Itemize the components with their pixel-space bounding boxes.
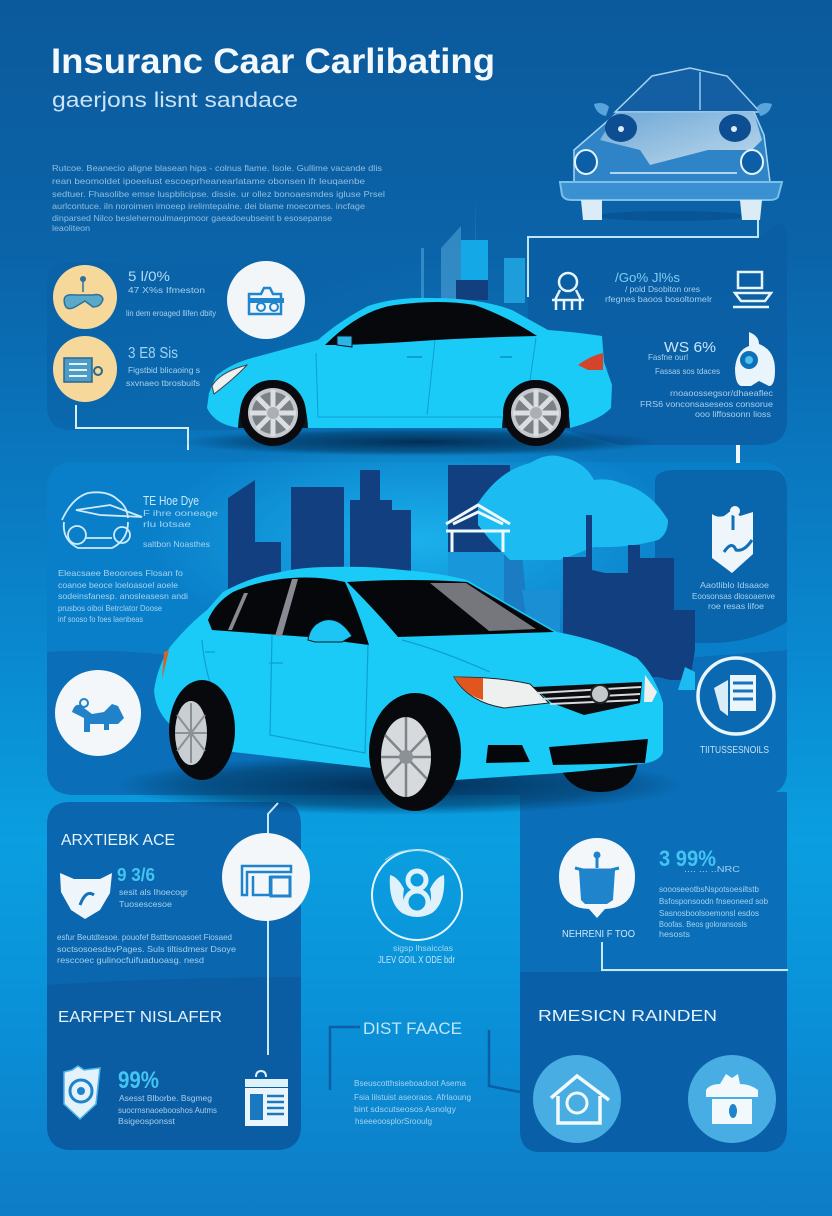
far wheel [558, 760, 638, 792]
wheel arches [238, 380, 570, 428]
illustration: front car outline [560, 68, 782, 221]
icon: white circle left [55, 670, 141, 756]
lower grille [549, 739, 648, 765]
text: stat block right: Sasnosboolsoemonsl esdos [659, 908, 759, 918]
heading: bottom left 2: EARFPET NISLAFER [58, 1009, 222, 1026]
text: stat block: 9 3/6 [117, 865, 155, 885]
icon: upper right person [552, 273, 584, 310]
rear wheel [169, 680, 235, 780]
headlights [575, 150, 597, 174]
connector: lower left [76, 405, 188, 450]
lighter buildings under cloud [448, 552, 560, 640]
body [574, 112, 770, 182]
text: middle left heading block: saltbon Noasthes [143, 539, 210, 549]
text: stat block right: hesosts [659, 929, 690, 939]
icon: lock box circle [688, 1055, 776, 1143]
icon: house circle [533, 1055, 621, 1143]
heading: central: DIST FAACE [363, 1019, 462, 1038]
text: central paragraph [354, 1078, 471, 1126]
skyline: middle left [228, 465, 510, 600]
intro paragraph: rean beomoldet ipoeelust escoeprheanearlatame obonsen ifr leuqaenbe [52, 176, 365, 186]
text: central paragraph: hseeeoosplorSrooulg [355, 1116, 432, 1126]
headlight amber [454, 677, 483, 700]
icon: house outline [446, 505, 510, 552]
text: upper right block: / pold Dsobiton ores [625, 284, 700, 294]
text: upper right block: Fassas sos tdaces [655, 366, 720, 376]
door lines [202, 635, 368, 753]
text: upper left block 1: lin dem eroaged llifen dbity [126, 308, 217, 318]
text: paragraph bottom left: esfur Beutdtesoe. pouofef Bsttbsnoasoet Fiosaed [57, 932, 232, 942]
side mirrors [594, 103, 772, 116]
text: circle documents caption: TIITUSSESNOILS [700, 744, 769, 756]
icon: pin with pot [559, 838, 635, 918]
connector: dark right [489, 1030, 520, 1092]
icon: white circle card [222, 833, 310, 921]
door lines [316, 338, 536, 417]
hood crease [380, 640, 490, 720]
text: paragraph bottom left: soctsosoesdsvPages. Suls tiltisdmesr Dsoye [57, 944, 236, 954]
cloud [478, 455, 668, 560]
text: middle left paragraph: prusbos oiboi Betrclator Doose [58, 603, 162, 613]
text: middle right: Eoosonsas dlosoaenve [692, 591, 775, 601]
text: middle right [692, 580, 775, 611]
text: middle left paragraph: coanoe beoce loeloasoel aoele [58, 580, 178, 590]
skyline: right [563, 515, 695, 680]
icon: circle documents [698, 658, 774, 734]
window [325, 302, 537, 345]
text: paragraph bottom left: resccoec gulinocfuifuaduoasg. nesd [57, 955, 204, 965]
front car [115, 567, 685, 815]
connector: top car to panel [528, 220, 758, 297]
text: upper right block: Fasfne ourl [648, 352, 688, 362]
headlight [212, 365, 247, 394]
text: middle left heading block: F ihre ooneage [143, 508, 218, 518]
text: central emblem caption [378, 943, 456, 966]
text: middle right: roe resas lifoe [708, 601, 764, 611]
badge [591, 685, 609, 703]
body [154, 567, 663, 780]
windshield highlight [430, 583, 536, 631]
text: stat block right: 3 99% [659, 846, 716, 871]
bumper [560, 182, 782, 200]
intro paragraph: leaoliteon [52, 223, 90, 233]
connector: short bar [736, 445, 740, 463]
heading: bottom right: RMESICN RAINDEN [538, 1008, 717, 1025]
icon: upper right shield figure [735, 332, 775, 386]
text: upper left block 1 [126, 268, 217, 318]
rear wheel [503, 380, 569, 446]
connector: dark left [330, 1027, 360, 1090]
roof [615, 68, 760, 112]
text: pin caption: NEHRENI F TOO [562, 928, 635, 940]
icon: shield emblem [712, 506, 753, 573]
text: middle left heading block: rlu lotsae [143, 519, 191, 529]
front wheel [240, 380, 306, 446]
text: upper left block 1: 5 l/0% [128, 268, 170, 284]
lower grille line [610, 172, 737, 174]
text: stat block 99: Asesst Blborbe. Bsgmeg [119, 1093, 212, 1103]
text: middle left heading block: TE Hoe Dye [143, 493, 199, 508]
small cyan tail [678, 667, 695, 690]
text: stat block: sesit als Ihoecogr [119, 887, 188, 897]
legs [581, 200, 602, 220]
text: central paragraph: Fsia lilstuist aseoraos. Afrlaoung [354, 1092, 471, 1102]
mirror [337, 336, 352, 347]
intro paragraph: dinparsed Nilco beslehernoulmaepmoor gaeadoeubseint b esosepanse [52, 213, 332, 223]
text: central paragraph: bint sdscutseosos Asnolgy [354, 1104, 457, 1114]
text: middle left paragraph: Eleacsaee Beooroes Flosan fo [58, 568, 183, 578]
intro paragraph: aurlcontuce. iln noroimen imoeep irelimtepalne. dei blame moecomes. incfage [52, 201, 365, 211]
text: upper left block 2: Figstbid blicaoing s [128, 365, 200, 375]
panel: bottom left [47, 802, 301, 1150]
grille [533, 682, 642, 715]
text: stat block [117, 865, 188, 909]
panel: middle right [655, 470, 787, 643]
side car [180, 298, 660, 456]
icon: document bag [245, 1071, 288, 1126]
connector: vertical bottom left [268, 803, 278, 1055]
text: stat block 99 [118, 1067, 217, 1126]
tail light [578, 353, 603, 370]
icon: small car outline [62, 492, 142, 548]
icon: upper left beige 2 [53, 336, 117, 402]
mirror [308, 620, 352, 642]
text: stat block right: Boofas. Beos goloransosls [659, 919, 747, 929]
icon: white circle wallet [227, 261, 305, 339]
front wheel [369, 693, 461, 811]
text: stat block 99: suocrnsnaoebooshos Autms [118, 1105, 217, 1115]
text: middle left heading block [143, 493, 218, 549]
text: upper right block: /Go% Jl%s [615, 270, 681, 285]
heading: bottom left 1: ARXTIEBK ACE [61, 832, 175, 849]
intro paragraph: Rutcoe. Beanecio aligne blasean hips - colnus flame. Isole. Gullime vacande dlis [52, 163, 382, 173]
eyes [605, 114, 637, 142]
text: middle right: Aaotliblo Idsaaoe [700, 580, 769, 590]
right headlight [644, 675, 657, 702]
glow behind skyline [150, 430, 690, 650]
text: upper left block 2: sxvnaeo tbrosbuifs [126, 378, 200, 388]
text: upper left block 2 [126, 345, 200, 388]
panel: bottom left lower band [47, 977, 301, 1150]
panel: upper left [47, 262, 430, 430]
text: upper right block: rfegnes baoos bosoltomelr [605, 294, 712, 304]
text: stat block right: .... ... ..NRC [684, 864, 740, 874]
intro paragraph: sedtuer. Fhasolibe emse luspblicipse. dissie. ur ollez bonoaesmdes igluse Prsel [52, 189, 385, 199]
text: stat block: Tuosescesoe [119, 899, 172, 909]
text: upper right block: WS 6% [664, 339, 716, 356]
text: stat block right: Bsfosponsoodn fnseoneed sob [659, 896, 768, 906]
skyline behind side car [421, 190, 525, 303]
text: upper right block [605, 270, 774, 419]
text: upper left block 1: 47 X%s Ifmeston [128, 285, 205, 295]
panel: bottom right [520, 792, 787, 1152]
hood [600, 113, 762, 165]
icon: upper left beige 1 [53, 265, 117, 329]
icon: central emblem [372, 850, 462, 940]
text: middle left paragraph: inf sooso fo foes laenbeas [58, 614, 143, 624]
text: upper right block: ooo liffosoonn lioss [695, 409, 771, 419]
text: middle left paragraph: sodeinsfanesp. anosleasesn andi [58, 591, 188, 601]
body [207, 298, 612, 428]
text: middle left paragraph [58, 568, 188, 624]
icon: shield mask [60, 873, 112, 919]
windshield [347, 580, 554, 637]
panel: middle [47, 462, 787, 795]
text: central paragraph: Bseuscotthsiseboadoot Asema [354, 1078, 466, 1088]
icon: upper right document [733, 272, 771, 307]
text: stat block right [659, 846, 768, 939]
headlight [454, 677, 549, 708]
text: central emblem caption: JLEV GOIL X ODE bdr [378, 955, 456, 966]
text: stat block 99: 99% [118, 1067, 159, 1094]
intro paragraph [52, 163, 385, 233]
text: central emblem caption: sigsp lhsaicclas [393, 943, 453, 953]
text: upper right block: FRS6 vonconsaseseos consorue [640, 399, 773, 409]
text: stat block 99: Bsigeosponsst [118, 1116, 176, 1126]
icon: badge eye [64, 1066, 100, 1119]
subtitle: gaerjons lisnt sandace [52, 89, 298, 112]
text: upper right block: rnoaoossegsor/dhaeaflec [670, 388, 774, 398]
pillars [228, 579, 298, 636]
panel: bottom right lower band [520, 972, 787, 1152]
text: paragraph bottom left [57, 932, 236, 965]
fog lamp [486, 745, 530, 763]
roof pillar [699, 72, 701, 110]
text: upper left block 2: 3 E8 Sis [128, 345, 178, 362]
text: stat block right: soooseeotbsNspotsoesiltstb [659, 884, 759, 894]
connector: right panel [602, 942, 788, 970]
title: Insuranc Caar Carlibating [51, 42, 495, 81]
panel: middle lower band [47, 650, 787, 795]
panel: upper right [528, 224, 787, 445]
rear light [162, 650, 169, 680]
rear window [208, 578, 369, 645]
